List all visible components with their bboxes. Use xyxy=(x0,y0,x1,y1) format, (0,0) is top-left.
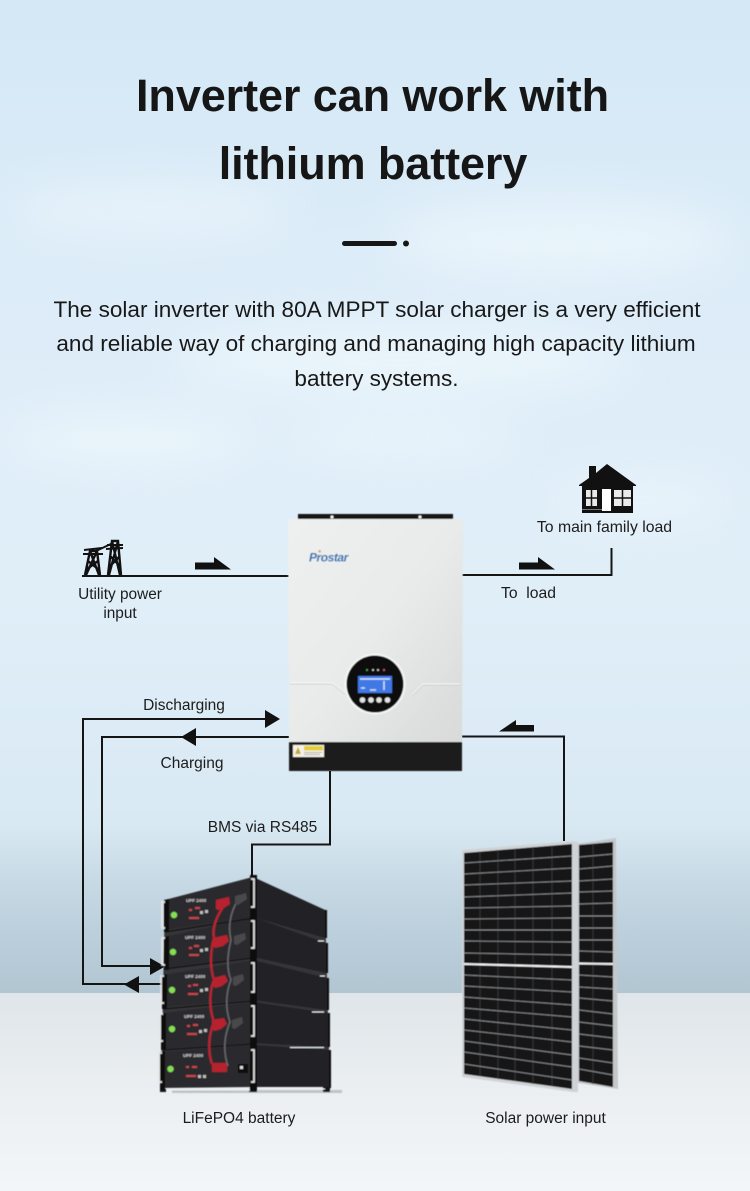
title xyxy=(136,70,609,189)
description text xyxy=(53,297,701,391)
rear solar panel xyxy=(576,838,618,1089)
module labels and indicators xyxy=(183,898,207,1058)
description text: battery systems. xyxy=(294,366,459,391)
arrow: to load xyxy=(519,557,555,570)
red cables and connectors xyxy=(209,907,223,1064)
logo: Prostar xyxy=(309,550,350,564)
label: utility power input: input xyxy=(103,605,137,622)
module labels and indicators: UPF 2400 xyxy=(186,898,207,903)
label: to load: To load xyxy=(501,585,556,602)
arrow: charging into battery xyxy=(150,958,165,975)
title: Inverter can work with xyxy=(136,70,609,121)
label: BMS via RS485: BMS via RS485 xyxy=(208,819,317,836)
description text: The solar inverter with 80A MPPT solar charger is a very efficient xyxy=(53,297,701,322)
arrow: solar input xyxy=(499,720,534,732)
solar panels xyxy=(462,838,618,1092)
label: utility power input xyxy=(78,586,162,622)
description text: and reliable way of charging and managing high capacity lithium xyxy=(56,331,696,356)
title: lithium battery xyxy=(219,138,527,189)
inverter base xyxy=(289,742,462,771)
battery module 5 xyxy=(161,1045,329,1088)
battery module 4 xyxy=(163,1002,328,1049)
label: LiFePO4 battery: LiFePO4 battery xyxy=(183,1110,296,1127)
label: solar power input: Solar power input xyxy=(485,1110,607,1127)
inverter xyxy=(288,514,463,771)
label: to main family load: To main family load xyxy=(537,519,672,536)
module gaps highlight xyxy=(170,941,325,1090)
floor shadow xyxy=(172,1090,342,1093)
green power LEDs xyxy=(167,912,177,1072)
arrow: utility input xyxy=(195,557,231,570)
label: utility power input: Utility power xyxy=(78,586,162,603)
label: charging: Charging xyxy=(161,755,223,772)
battery stack xyxy=(159,875,342,1093)
module labels and indicators: UPF 2400 xyxy=(183,1053,204,1058)
icon: power pylons xyxy=(83,541,123,575)
battery module 2 xyxy=(165,917,326,973)
arrow: charging from inverter xyxy=(181,728,196,746)
white handles xyxy=(159,879,254,1082)
black cables xyxy=(225,903,236,1066)
mounting bracket xyxy=(298,514,453,521)
battery module 1 xyxy=(165,877,325,938)
corner posts xyxy=(160,875,331,1091)
caution label xyxy=(293,745,324,757)
battery stack backing xyxy=(161,877,329,1087)
front solar panel xyxy=(462,841,578,1092)
icon: house xyxy=(579,464,636,513)
label: discharging: Discharging xyxy=(143,697,225,714)
rack feet xyxy=(160,1087,330,1092)
wiring lines xyxy=(82,548,612,984)
inverter body xyxy=(288,519,463,743)
module labels and indicators: UPF 2400 xyxy=(185,935,206,940)
title divider xyxy=(342,240,409,246)
module labels and indicators: UPF 2400 xyxy=(185,974,206,979)
module labels and indicators: UPF 2400 xyxy=(184,1014,205,1019)
control panel xyxy=(344,654,406,714)
battery module 3 xyxy=(163,960,327,1010)
arrow: discharging to inverter xyxy=(265,710,280,728)
arrow: discharging out of battery xyxy=(124,976,139,993)
